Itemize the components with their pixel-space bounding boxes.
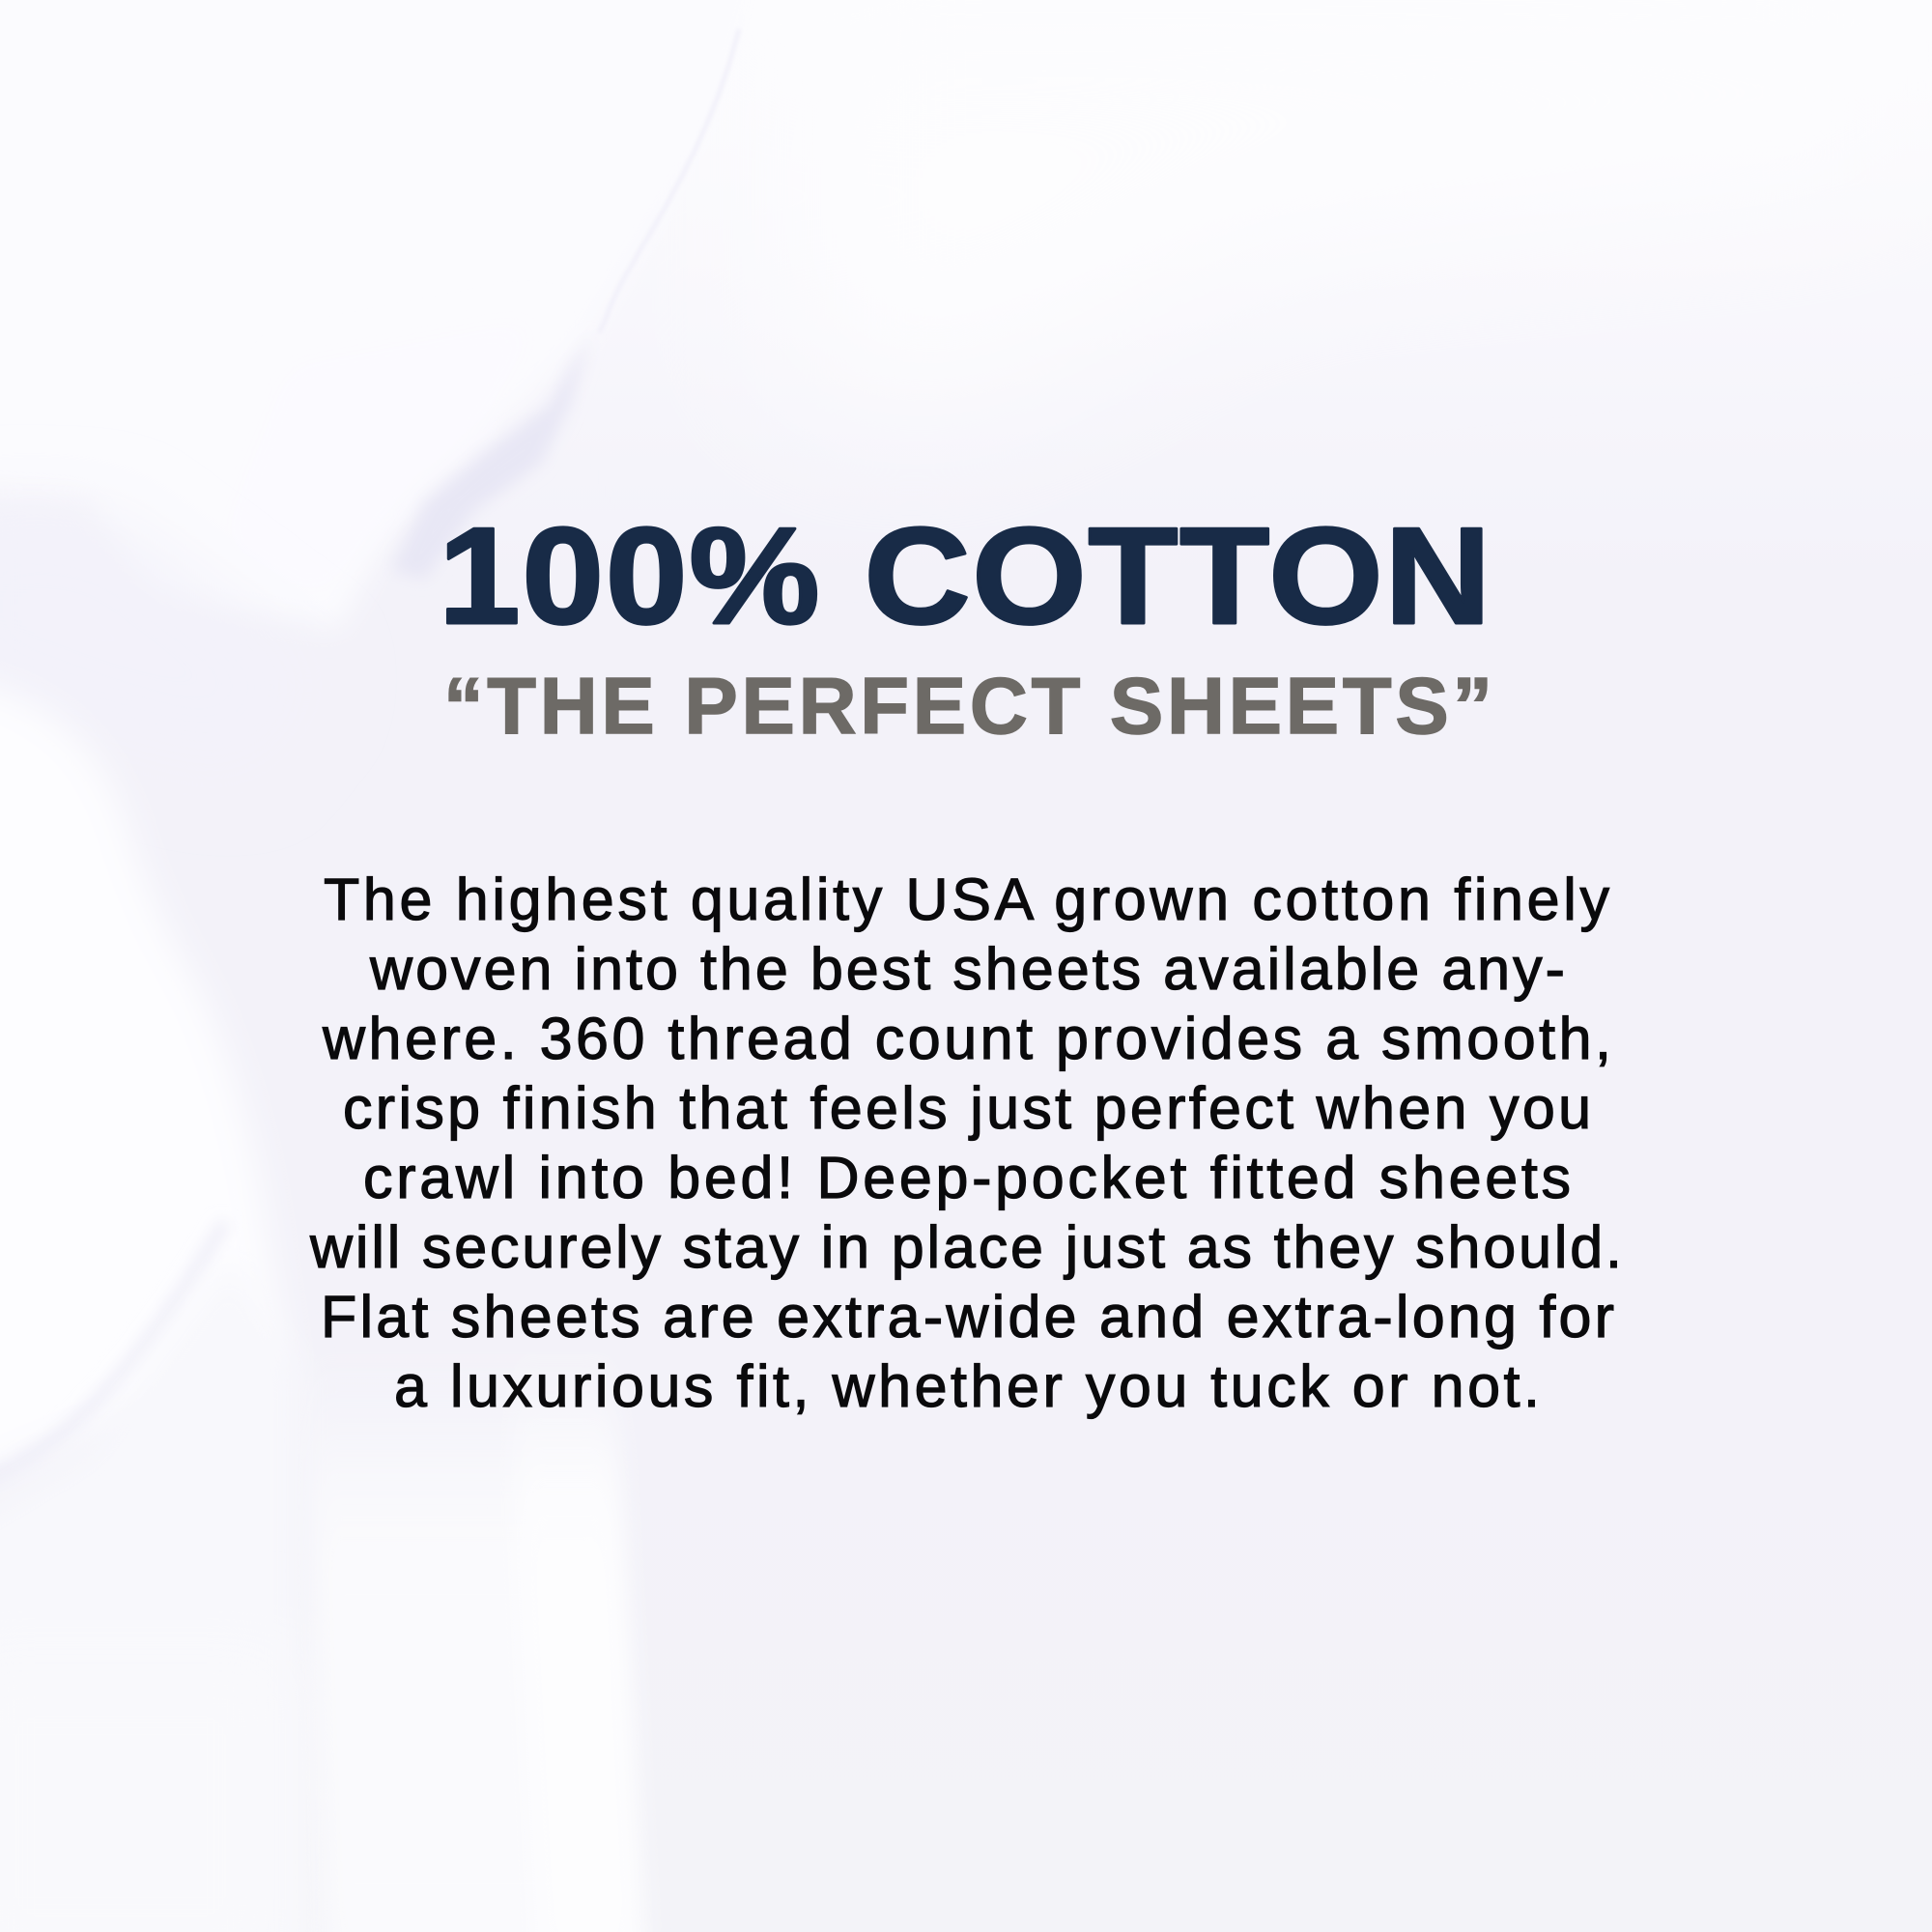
body text block: crawl into bed! Deep-pocket fitted sheets xyxy=(363,1145,1571,1210)
body text block: crisp finish that feels just perfect when you xyxy=(343,1075,1591,1141)
body text block: will securely stay in place just as they should. xyxy=(309,1214,1622,1280)
body text block xyxy=(309,867,1622,1419)
body text block: a luxurious fit, whether you tuck or not. xyxy=(394,1353,1540,1419)
body text block: The highest quality USA grown cotton finely xyxy=(324,867,1609,932)
title: 100% COTTON xyxy=(439,500,1491,653)
subtitle: “THE PERFECT SHEETS” xyxy=(443,661,1492,751)
body text block: woven into the best sheets available any- xyxy=(369,936,1565,1002)
body text block: where. 360 thread count provides a smooth, xyxy=(322,1006,1611,1071)
body text block: Flat sheets are extra-wide and extra-long for xyxy=(321,1284,1614,1350)
